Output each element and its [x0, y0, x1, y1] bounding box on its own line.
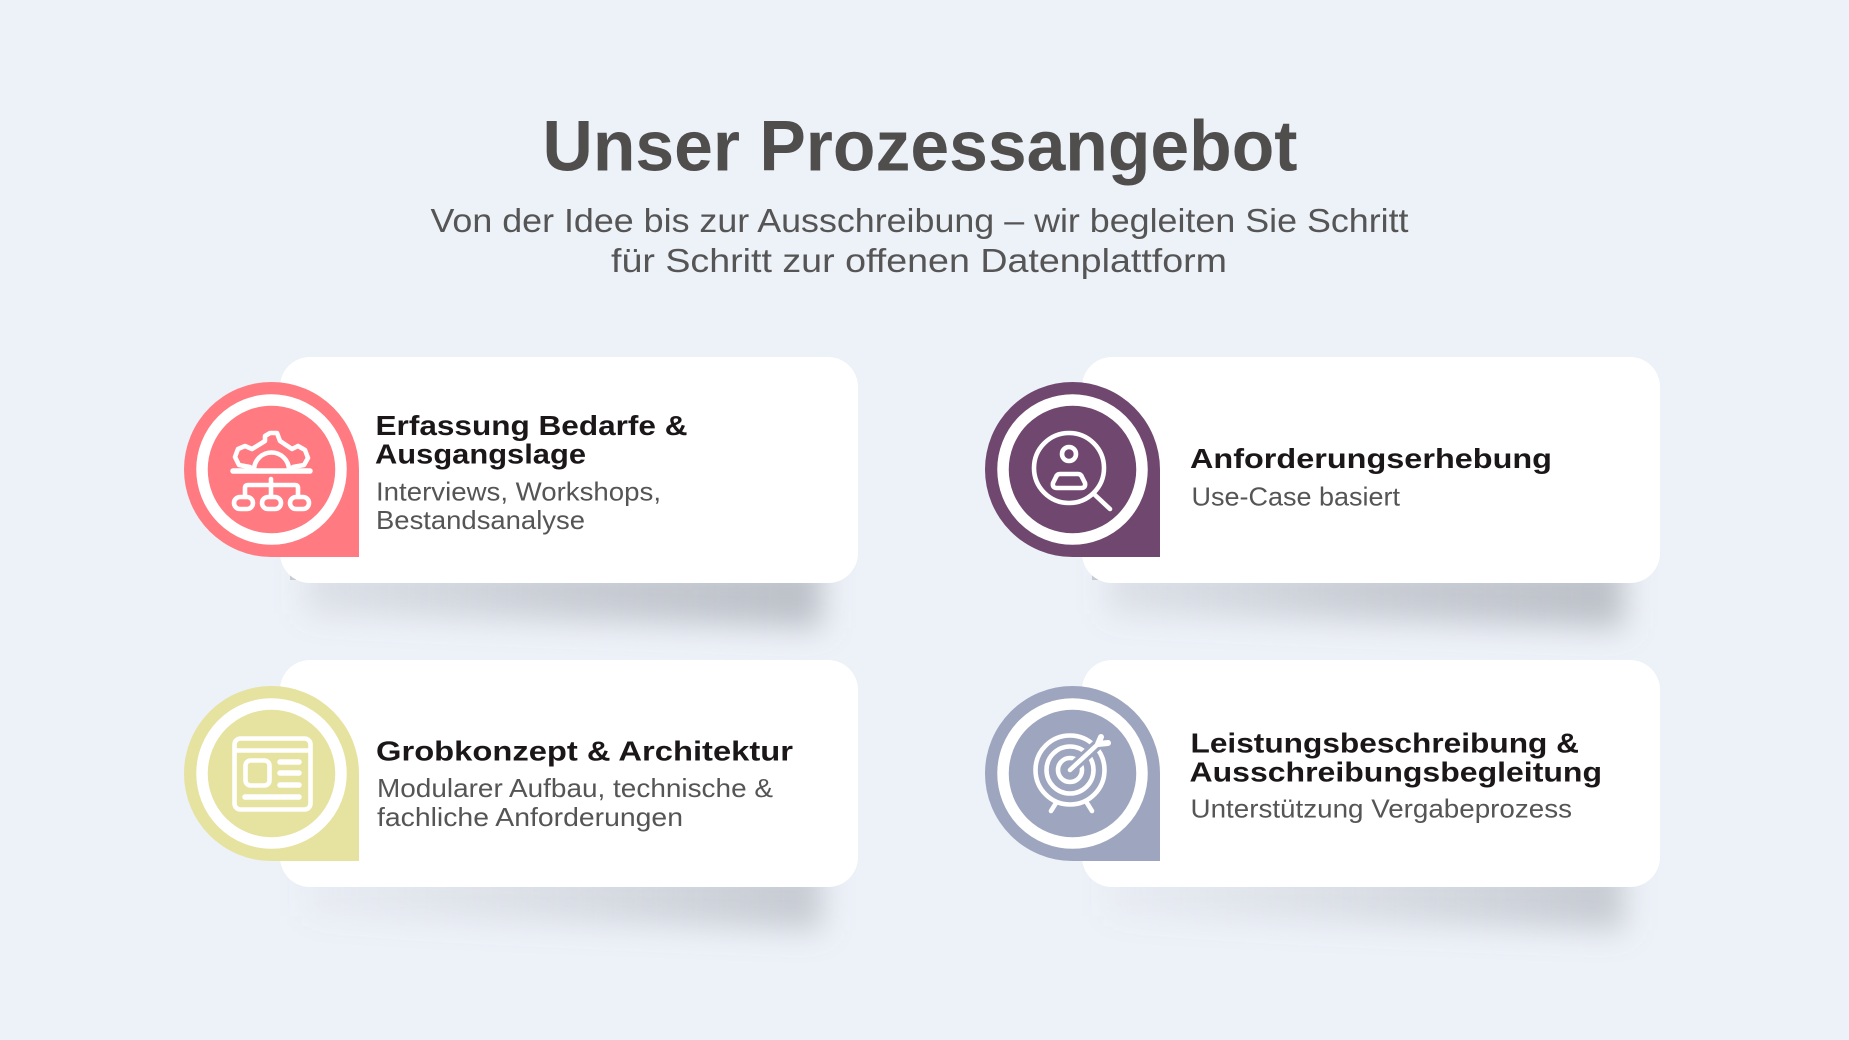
description: Unterstützung Vergabeprozess: [1190, 794, 1572, 824]
description: [377, 773, 773, 832]
heading: Ausschreibungsbegleitung: [1190, 756, 1602, 788]
card: [280, 660, 858, 887]
heading: [375, 410, 688, 470]
card shadow: [1107, 864, 1624, 930]
heading: Ausgangslage: [375, 438, 586, 470]
heading: Erfassung Bedarfe &: [376, 410, 688, 441]
heading: Anforderungserhebung: [1190, 443, 1552, 474]
card shadow: [305, 560, 822, 628]
description: Modularer Aufbau, technische &: [377, 773, 773, 803]
card: [1082, 357, 1660, 583]
icon: layout window: [234, 738, 310, 810]
card shadow: [1107, 560, 1624, 628]
badge: [985, 382, 1160, 557]
panel: Erfassung Bedarfe und Ausgangslage: [184, 357, 858, 628]
icon: target with arrow: [1036, 736, 1108, 811]
subtitle: für Schritt zur offenen Datenplattform: [611, 242, 1227, 279]
description: fachliche Anforderungen: [377, 802, 683, 832]
description: [376, 476, 661, 535]
description: Bestandsanalyse: [376, 505, 585, 535]
badge: [184, 382, 359, 557]
shadow corner: [1092, 574, 1098, 580]
card: [1082, 660, 1660, 887]
badge ring: [1003, 400, 1142, 539]
panel: Grobkonzept und Architektur: [184, 660, 858, 930]
badge ring: [1003, 704, 1142, 843]
icon: gear with network: [233, 433, 310, 509]
card: [280, 357, 858, 583]
shadow corner: [290, 574, 296, 580]
badge: [985, 686, 1160, 861]
heading: [1190, 728, 1602, 788]
badge ring: [202, 704, 341, 843]
description: Use-Case basiert: [1192, 482, 1401, 512]
badge ring: [202, 400, 341, 539]
heading: Leistungsbeschreibung &: [1190, 728, 1579, 758]
description: Interviews, Workshops,: [376, 476, 661, 506]
card shadow: [305, 864, 822, 930]
panel: Leistungsbeschreibung und Ausschreibungsbegleitung: [985, 660, 1660, 930]
heading: Grobkonzept & Architektur: [376, 736, 793, 766]
subtitle: [430, 202, 1408, 279]
badge: [184, 686, 359, 861]
panel: Anforderungserhebung: [985, 357, 1660, 628]
title: Unser Prozessangebot: [542, 108, 1298, 186]
icon: person in magnifier: [1034, 433, 1110, 509]
subtitle: Von der Idee bis zur Ausschreibung – wir begleiten Sie Schritt: [430, 202, 1408, 239]
